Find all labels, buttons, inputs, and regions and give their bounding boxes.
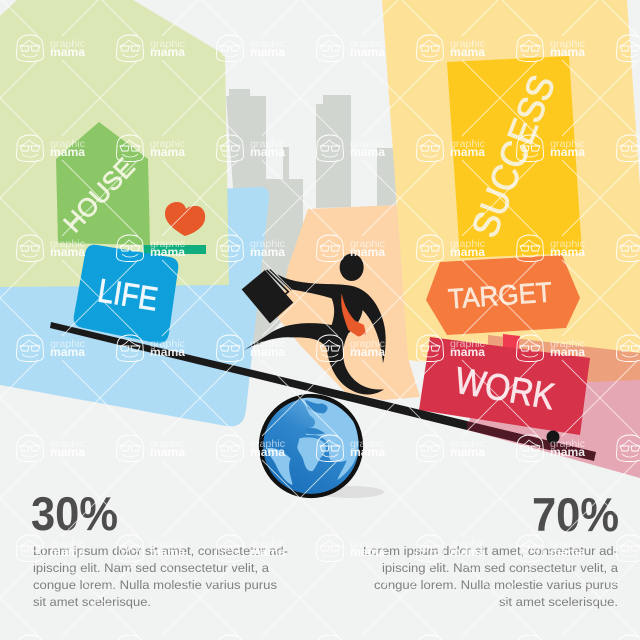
text block: left description: ipiscing elit. Nam sed consectetur velit, a bbox=[33, 561, 269, 575]
label: HOUSE: HOUSE bbox=[57, 152, 141, 238]
stat: 30%: 30% bbox=[31, 487, 118, 540]
text block: left description: sit amet scelerisque. bbox=[33, 595, 151, 609]
panel: pale yellow success backdrop bbox=[382, 0, 640, 362]
card: life bbox=[74, 245, 178, 343]
panel: pink work backdrop bbox=[468, 380, 640, 478]
icon: globe bbox=[261, 396, 361, 496]
panel: peach backdrop bbox=[278, 205, 420, 400]
card: work bbox=[419, 334, 590, 435]
head bbox=[340, 254, 364, 281]
body bbox=[243, 274, 386, 394]
text block: right description: Lorem ipsum dolor sit amet, consectetur ad- bbox=[363, 544, 618, 558]
panel: light green house backdrop bbox=[0, 0, 229, 287]
ball bbox=[546, 430, 560, 444]
globe shadow bbox=[316, 486, 384, 498]
panel: light blue life backdrop bbox=[0, 187, 269, 426]
text block: left description bbox=[33, 544, 288, 609]
panel: salmon backdrop bbox=[488, 335, 640, 392]
label: TARGET: TARGET bbox=[447, 276, 553, 315]
briefcase bbox=[242, 270, 293, 323]
card: target bbox=[426, 255, 580, 335]
text block: right description bbox=[363, 544, 618, 609]
text block: left description: congue lorem. Nulla molestie varius purus bbox=[33, 578, 277, 592]
stat: 70%: 70% bbox=[532, 488, 619, 541]
text block: left description: Lorem ipsum dolor sit amet, consectetur ad- bbox=[33, 544, 288, 558]
label: WORK: WORK bbox=[452, 360, 558, 417]
tie bbox=[341, 293, 366, 337]
beam bbox=[50, 322, 596, 461]
card: success bbox=[447, 56, 582, 258]
label: LIFE: LIFE bbox=[95, 272, 160, 317]
text block: right description: congue lorem. Nulla molestie varius purus bbox=[374, 578, 618, 592]
text block: right description: ipiscing elit. Nam sed consectetur velit, a bbox=[382, 561, 618, 575]
icon: running businessman bbox=[242, 254, 386, 394]
city skyline bbox=[226, 89, 396, 345]
icon: green house bbox=[56, 122, 150, 245]
label: SUCCESS: SUCCESS bbox=[464, 69, 563, 243]
icon: heart with bar bbox=[143, 202, 206, 254]
text block: right description: sit amet scelerisque. bbox=[499, 595, 618, 609]
